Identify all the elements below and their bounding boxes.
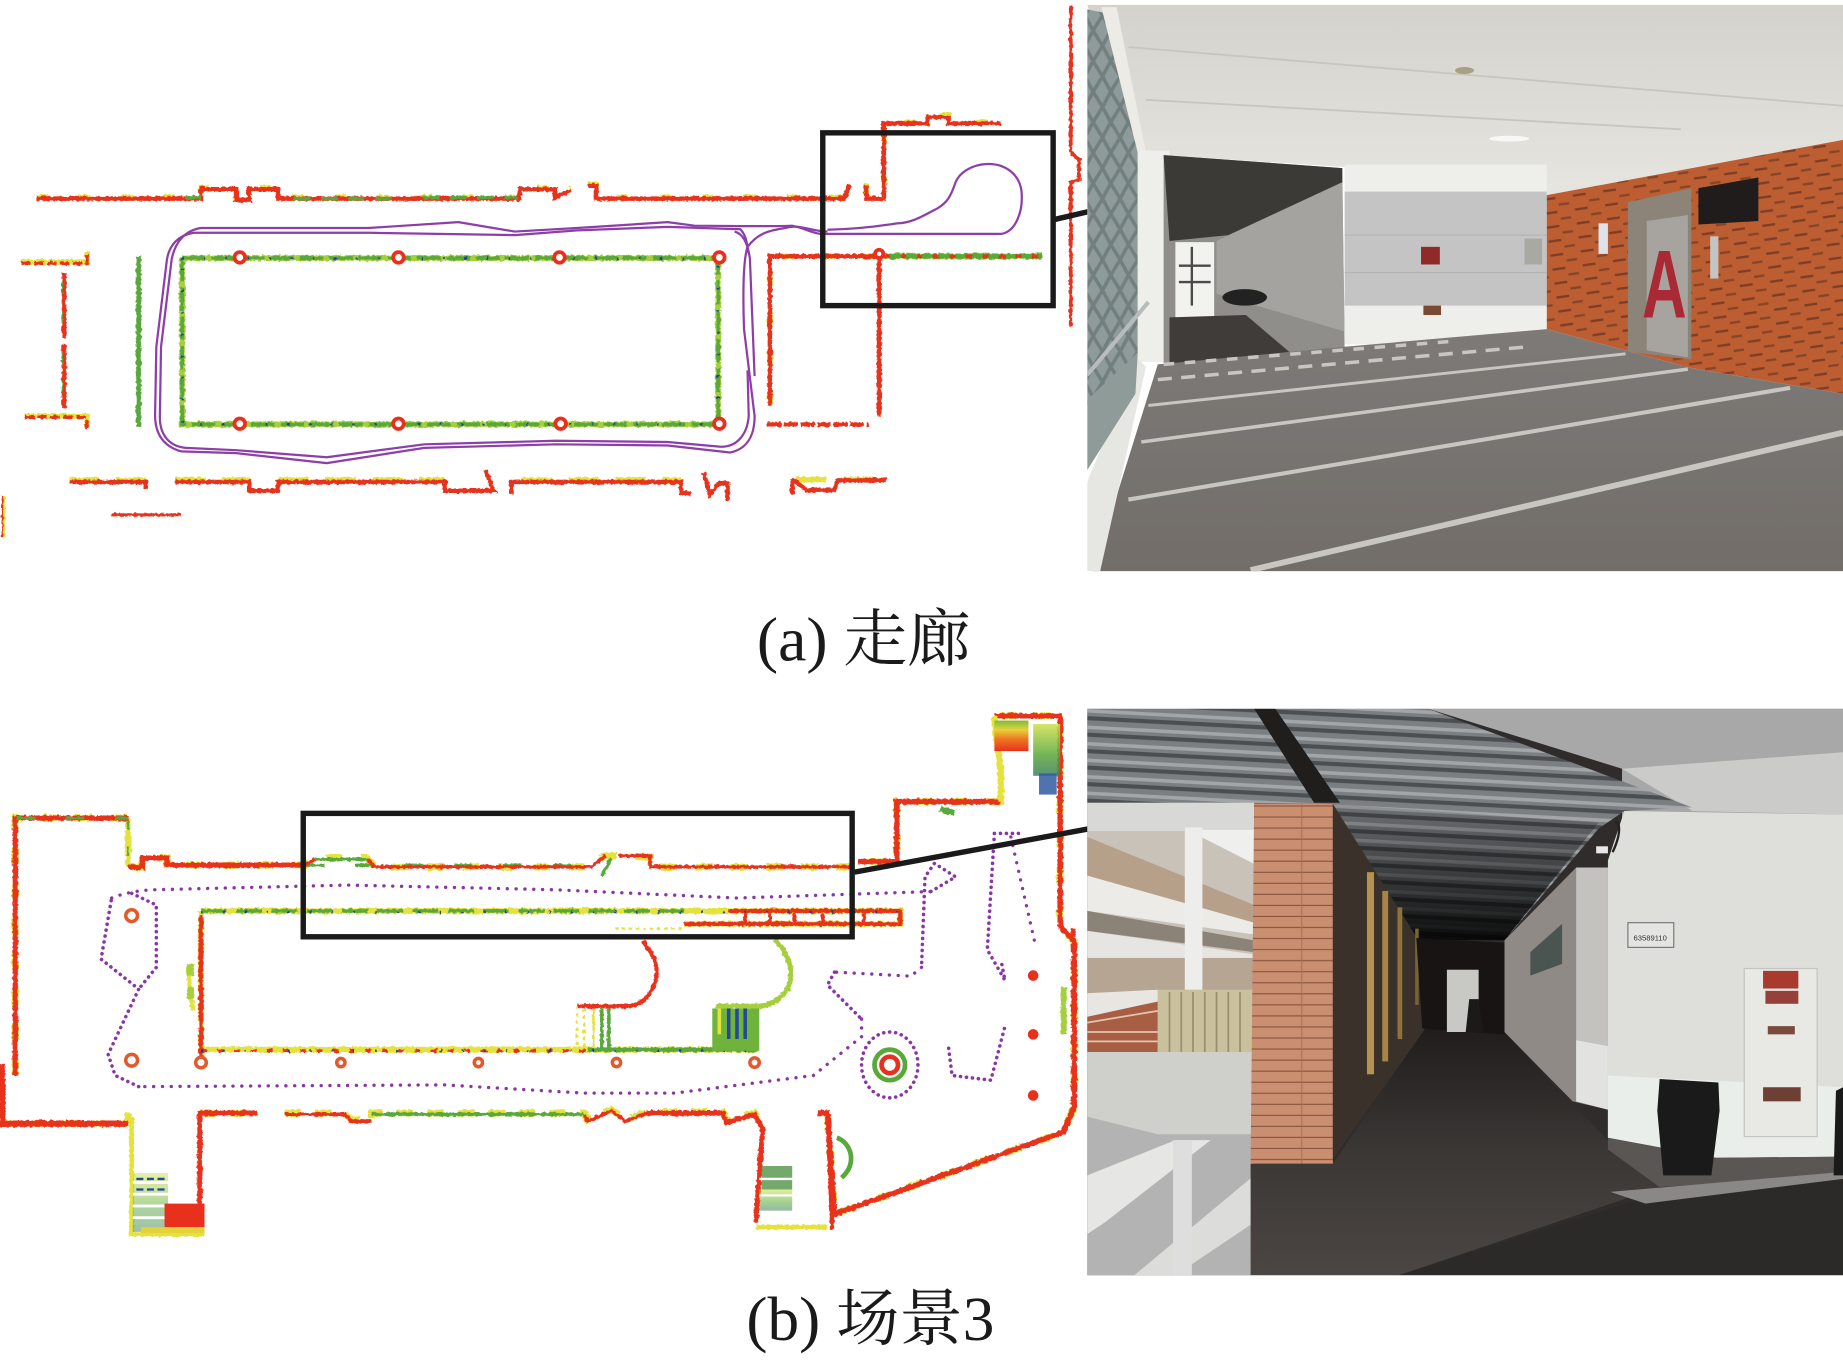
photo: scene 3 interior: 63589110 <box>1634 933 1667 942</box>
white column <box>1138 150 1170 362</box>
floor <box>1251 1028 1660 1275</box>
caption (b): (b) 场景3 <box>746 1285 994 1354</box>
point-cloud stair blocks <box>133 721 1060 1233</box>
security camera <box>1613 822 1619 852</box>
far corridor end <box>1416 938 1504 1034</box>
white wall <box>1608 811 1843 1158</box>
grey wall <box>1345 165 1547 344</box>
photo: scene 3 interior <box>1087 709 1843 1275</box>
floor <box>1093 329 1843 571</box>
atrium stairs and kiosk <box>1087 1001 1158 1052</box>
highlight box (b) <box>303 813 852 937</box>
ceiling <box>1087 5 1843 195</box>
point-cloud walls of scene 3 <box>0 716 1074 1234</box>
lift door <box>1628 188 1691 360</box>
caption (a): (a) 走廊 <box>757 606 971 675</box>
trajectory: purple dots <box>101 833 1034 1098</box>
wall screen <box>1698 177 1758 225</box>
dark brown wall with slots <box>1333 804 1425 1159</box>
window wall <box>1087 9 1138 406</box>
trajectory: purple path <box>155 164 1022 463</box>
brick wall <box>1547 140 1843 394</box>
upper right ceiling <box>1428 709 1843 823</box>
right corridor wall <box>1504 867 1608 1110</box>
reflective floor <box>1088 1116 1254 1275</box>
panel: corridor map (a) <box>2 6 1088 537</box>
far corridor <box>1164 155 1345 364</box>
waste bins <box>1657 1079 1720 1175</box>
brick column <box>1251 804 1333 1164</box>
pillars: rings and red dots <box>126 910 1038 1101</box>
highlight box (a) <box>823 133 1053 306</box>
window sill and handrail <box>1087 359 1146 571</box>
point-cloud walls of the corridor <box>2 6 1079 537</box>
red letter A: A <box>1642 231 1687 338</box>
connector line (b) <box>855 829 1090 872</box>
slatted ceiling <box>1087 709 1693 940</box>
fire door and signs <box>1744 969 1817 1137</box>
connector line (a) <box>1053 212 1088 220</box>
pillars: red rings <box>234 250 883 429</box>
photo: corridor with lift <box>1087 5 1843 571</box>
atrium upper floors <box>1087 803 1254 1067</box>
floor lines <box>1128 341 1843 570</box>
panel: scene 3 map (b) <box>0 716 1090 1234</box>
